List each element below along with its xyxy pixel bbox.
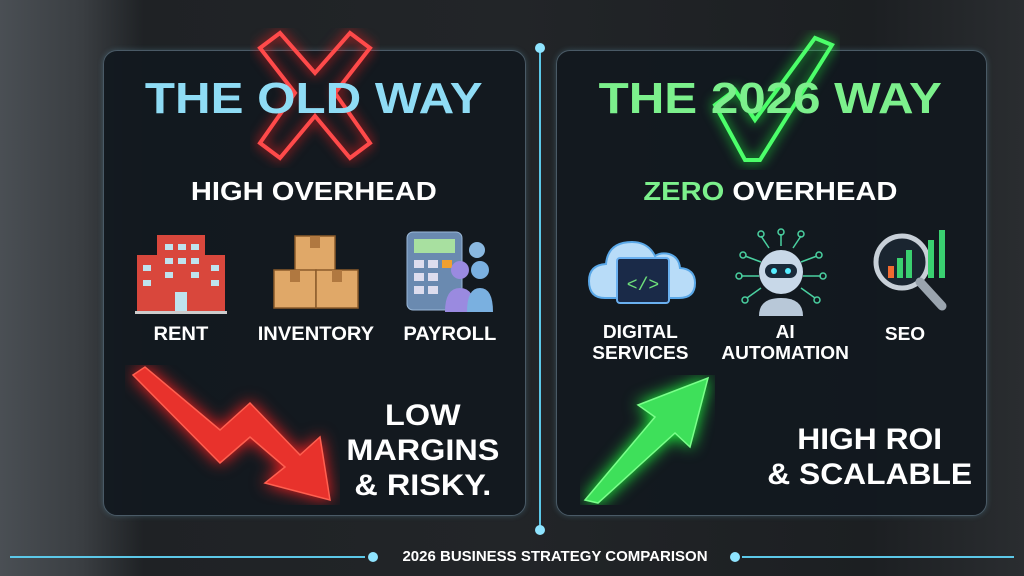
text: high roi: & SCALABLE <box>768 458 972 491</box>
panel: old way <box>103 50 526 516</box>
icon: cloud code <box>588 241 696 304</box>
label: inventory: INVENTORY <box>258 324 374 345</box>
text: high roi: HIGH ROI <box>798 423 942 456</box>
text: low margins <box>346 399 499 502</box>
title: old way: THE OLD WAY <box>145 74 482 123</box>
icon: green check <box>705 30 840 170</box>
text: low margins: MARGINS <box>346 434 499 467</box>
icon: red X <box>250 28 380 168</box>
label: digital services <box>592 322 688 363</box>
label: seo: SEO <box>885 324 925 344</box>
label: digital services: SERVICES <box>592 343 688 363</box>
label: digital services: DIGITAL <box>603 322 677 342</box>
label: ai automation <box>721 322 849 363</box>
label: ai automation: AI <box>775 322 795 342</box>
label: payroll: PAYROLL <box>404 324 496 345</box>
label: ai automation: AUTOMATION <box>721 343 849 363</box>
icon: cloud code: </> <box>627 276 659 296</box>
text: low margins: LOW <box>385 399 460 432</box>
text: low margins: & RISKY. <box>354 469 491 502</box>
icon: SEO magnifier <box>874 230 946 310</box>
heading: zero overhead: ZERO OVERHEAD <box>643 176 898 206</box>
heading: high overhead: HIGH OVERHEAD <box>191 176 436 206</box>
text: high roi <box>768 423 972 491</box>
icon: AI robot <box>735 228 827 316</box>
arrow: red down <box>125 365 340 505</box>
footer caption: 2026 BUSINESS STRATEGY COMPARISON <box>402 548 708 565</box>
title: 2026 way: THE 2026 WAY <box>599 74 942 123</box>
icon: rent building <box>135 235 227 314</box>
icon: inventory boxes <box>273 235 359 309</box>
label: rent: RENT <box>154 324 208 345</box>
arrow: green up <box>580 375 715 505</box>
panel: 2026 way <box>556 50 987 516</box>
icon: payroll calculator <box>406 232 493 312</box>
